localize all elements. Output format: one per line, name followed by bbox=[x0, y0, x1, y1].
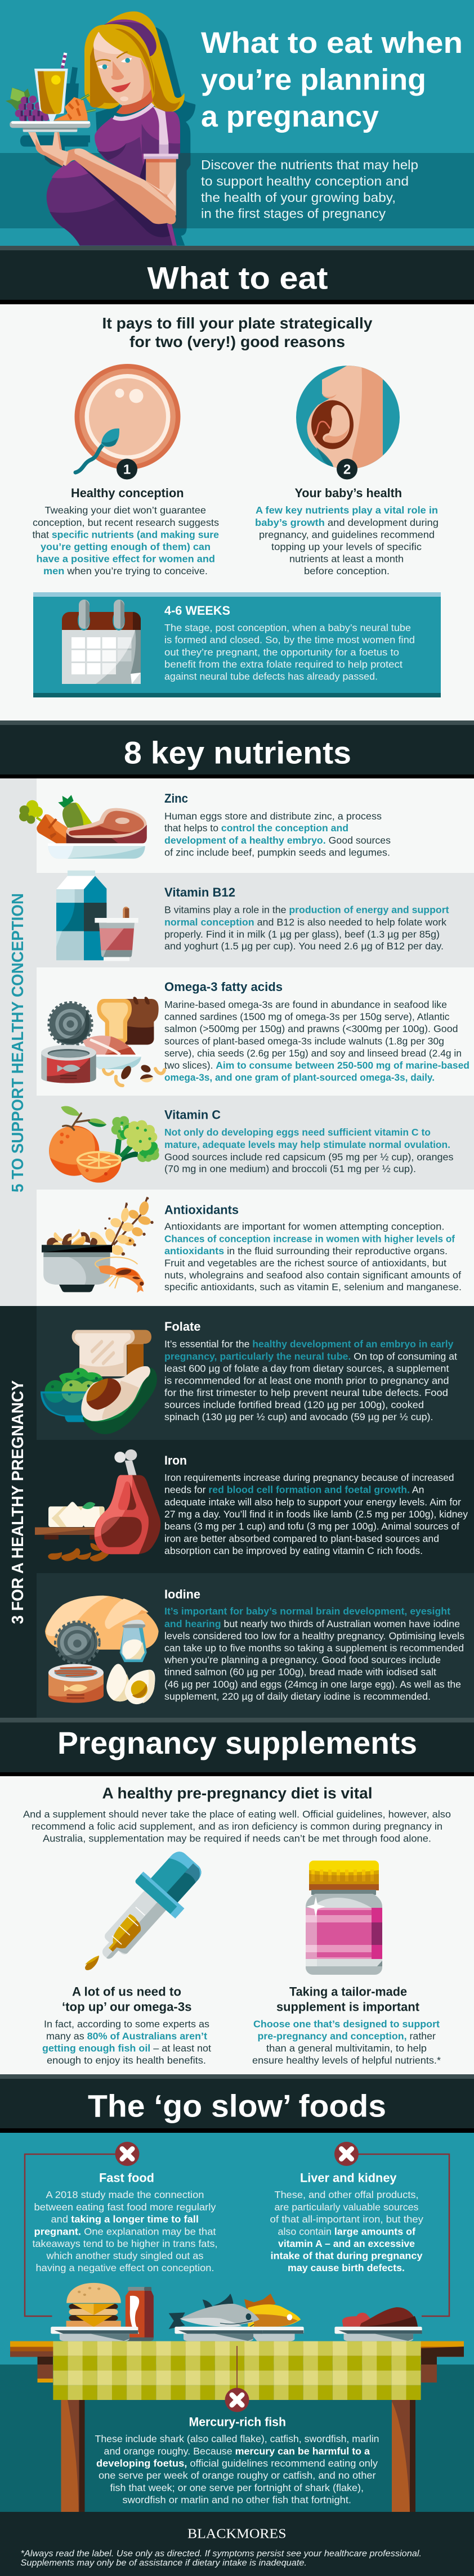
text block: liver and kidney: of that all-important iron, but they bbox=[270, 2214, 423, 2225]
text block: tailor-made supplement: than a general multivitamin, to help bbox=[266, 2043, 427, 2054]
text block: liver and kidney: intake of that during pregnancy bbox=[270, 2250, 423, 2261]
icon: calendar bbox=[62, 600, 141, 684]
food: fish bbox=[169, 2294, 304, 2341]
text: antioxidants: specific antioxidants, such as vitamin E, selenium and manganese. bbox=[164, 1281, 462, 1292]
icon: milk carton and yoghurt bbox=[56, 871, 138, 961]
text block: fast food: pregnant. One explanation may be that bbox=[34, 2226, 216, 2237]
vertical label: 3 for a healthy pregnancy: 3 FOR A HEALTHY PREGNANCY bbox=[9, 1380, 27, 1624]
text: folate: least 600 µg of folate a day from dietary sources, a supplement bbox=[164, 1363, 449, 1374]
subtitle: to support healthy conception and bbox=[201, 174, 409, 188]
text block: tailor-made supplement bbox=[252, 1984, 441, 2066]
text: iodine bbox=[164, 1587, 464, 1702]
text: antioxidants bbox=[164, 1203, 462, 1292]
text block: mercury-rich fish: fish that week; or one serve per fortnight of shark (flake), bbox=[110, 2482, 364, 2493]
pin line and cross badge: mercury bbox=[225, 2346, 249, 2412]
icon: cross badge, fast food bbox=[115, 2142, 140, 2166]
text: zinc: that helps to control the conception and bbox=[164, 822, 348, 834]
text block: your baby's health: before conception. bbox=[304, 565, 390, 577]
text block: healthy pre-pregnancy diet: Australia, supplementation may be required if needs can’t be met through food alone. bbox=[43, 1832, 431, 1844]
text block: healthy conception: you’re getting enough of them) can bbox=[41, 541, 211, 552]
subtitle bbox=[201, 157, 418, 220]
text block: top up omega-3s: enough to enjoy its health benefits. bbox=[47, 2055, 206, 2066]
text: folate bbox=[164, 1319, 457, 1422]
text block: top up omega-3s bbox=[42, 1984, 211, 2066]
text block: your baby's health: A few key nutrients play a vital role in bbox=[256, 505, 438, 516]
panel: footer bbox=[0, 2512, 474, 2576]
icon: egg and sperm bbox=[74, 364, 180, 472]
text block: top up omega-3s: getting enough fish oil – at least not bbox=[42, 2043, 211, 2054]
food: liver bbox=[334, 2307, 422, 2341]
icon: folate foods bbox=[41, 1330, 157, 1434]
text: iodine: Iodine bbox=[164, 1587, 200, 1601]
text block: tailor-made supplement: Choose one that’s designed to support bbox=[253, 2018, 440, 2029]
section header: 8 key nutrients bbox=[0, 720, 474, 778]
text: folate: is recommended for at least one month prior to pregnancy and bbox=[164, 1375, 449, 1386]
text: omega-3: omega-3s, and one gram of plant-sourced omega-3s, daily. bbox=[164, 1072, 435, 1083]
text: omega-3: sources of plant-based omega-3s include walnuts (1.8g per 30g bbox=[164, 1035, 444, 1047]
text: zinc: Human eggs store and distribute zinc, a process bbox=[164, 810, 382, 822]
text block: your baby's health: pregnancy, and guidelines recommend bbox=[259, 529, 435, 540]
vertical label: 5 to support healthy conception: 5 TO SUPPORT HEALTHY CONCEPTION bbox=[9, 893, 27, 1192]
text block: mercury-rich fish: developing foetus, official guidelines recommend eating only bbox=[96, 2458, 378, 2469]
illustration: table with foods bbox=[10, 2283, 464, 2512]
text block: mercury-rich fish: swordfish or marlin and no other fish that fortnight. bbox=[123, 2494, 351, 2505]
text: vitamin C: mature, adequate levels may help stimulate normal ovulation. bbox=[164, 1139, 450, 1150]
text block: mercury-rich fish: one serve per week of orange roughy or catfish, and no other bbox=[99, 2470, 376, 2481]
text block: healthy conception: conception, but recent research suggests bbox=[33, 517, 219, 528]
illustration: pregnant woman with tray of food bbox=[6, 11, 195, 246]
text: iodine: when you’re planning a pregnancy. Good food sources include bbox=[164, 1654, 441, 1665]
title: a pregnancy bbox=[201, 100, 379, 133]
text: iodine: can take up to five months so taking a supplement is recommended bbox=[164, 1642, 464, 1654]
text: vitamin B12: B vitamins play a role in the production of energy and support bbox=[164, 904, 449, 916]
panel: nutrient rows background bbox=[0, 778, 474, 1718]
tablecloth bbox=[53, 2341, 421, 2400]
text: 4-6 weeks: against neural tube defects has already passed. bbox=[164, 670, 378, 682]
text: folate: spinach (130 µg per ½ cup) and avocado (59 µg per ½ cup). bbox=[164, 1411, 433, 1422]
icon: zinc foods bbox=[19, 795, 147, 859]
outline: liver and kidney box bbox=[346, 2154, 449, 2316]
text block: your baby's health: topping up your levels of specific bbox=[271, 541, 422, 552]
text: zinc: development of a healthy embryo. Good sources bbox=[164, 835, 391, 846]
text block: tailor-made supplement: pre-pregnancy and conception, rather bbox=[258, 2030, 436, 2042]
section header: What to eat: What to eat bbox=[147, 260, 328, 296]
text: zinc: of zinc include beef, pumpkin seeds and legumes. bbox=[164, 847, 390, 858]
text block: liver and kidney: are particularly valuable sources bbox=[275, 2201, 419, 2213]
text: omega-3: serve), chia seeds (2.6g per 15g) and soy and linseed bread (2.4g in bbox=[164, 1047, 462, 1059]
text block: your baby's health bbox=[255, 486, 439, 577]
text: iodine: levels considered too low for a healthy pregnancy. Optimising levels bbox=[164, 1630, 464, 1641]
text block: healthy pre-pregnancy diet: recommend a folic acid supplement, and as iron deficiency is common during pregnancy in bbox=[32, 1821, 442, 1832]
text block: healthy pre-pregnancy diet: And a supplement should never take the place of eating well. Official guidelines, however, also bbox=[23, 1809, 451, 1820]
text: vitamin C: (70 mg in one medium) and broccoli (51 mg per ½ cup). bbox=[164, 1163, 416, 1174]
title: you’re planning bbox=[201, 63, 426, 97]
subtitle: Discover the nutrients that may help bbox=[201, 157, 418, 172]
text: omega-3: canned sardines (1500 mg of omega-3s per 150g serve), Atlantic bbox=[164, 1011, 450, 1023]
text: vitamin C: Not only do developing eggs need sufficient vitamin C to bbox=[164, 1127, 431, 1138]
text block: liver and kidney bbox=[270, 2171, 423, 2273]
text: 4-6 weeks bbox=[164, 604, 415, 682]
text: vitamin C: Good sources include red capsicum (95 mg per ½ cup), oranges bbox=[164, 1151, 454, 1163]
section header: go slow foods: The ‘go slow’ foods bbox=[88, 2088, 386, 2124]
text block: liver and kidney: may cause birth defects. bbox=[288, 2262, 405, 2273]
badge: 2: 2 bbox=[343, 462, 351, 477]
subtitle: in the first stages of pregnancy bbox=[201, 206, 386, 220]
text: antioxidants: Antioxidants are important for women attempting conception. bbox=[164, 1221, 445, 1232]
icon: cross badge, liver bbox=[334, 2142, 359, 2166]
text: folate: for the first trimester to help prevent neural tube defects. Food bbox=[164, 1387, 448, 1398]
text block: top up omega-3s: A lot of us need to bbox=[72, 1984, 181, 1999]
text: antioxidants: nuts, wholegrains and seafood also contain significant amounts of bbox=[164, 1269, 461, 1281]
disclaimer bbox=[20, 2549, 422, 2568]
text: 4-6 weeks: 4-6 WEEKS bbox=[164, 604, 230, 618]
heading: two good reasons: for two (very!) good reasons bbox=[129, 333, 345, 350]
panel: 4-6 weeks bbox=[33, 592, 441, 697]
logo text: BLACKMORES bbox=[187, 2527, 286, 2541]
text: omega-3: two slices). Aim to consume between 250-500 mg of marine-based bbox=[164, 1060, 469, 1071]
text block: top up omega-3s: ‘top up’ our omega-3s bbox=[62, 2000, 191, 2014]
text: iron: iron are better absorbed compared to plant-based sources and bbox=[164, 1533, 439, 1544]
text block: mercury-rich fish bbox=[95, 2415, 379, 2505]
badge: 1 bbox=[117, 459, 137, 479]
section header: pregnancy supplements bbox=[0, 1718, 474, 1776]
text: iron: 27 mg a day. You’ll find it in foods like lamb (2.5 mg per 100g), kidney bbox=[164, 1508, 468, 1520]
text block: fast food: between eating fast food more regularly bbox=[34, 2201, 216, 2213]
text block: fast food: A 2018 study made the connection bbox=[46, 2189, 204, 2200]
text block: liver and kidney: also contain large amounts of bbox=[278, 2226, 415, 2237]
text block: healthy conception: Tweaking your diet won’t guarantee bbox=[45, 505, 206, 516]
panel: hero bbox=[0, 0, 474, 246]
panel: go slow background bbox=[0, 2133, 474, 2512]
text: vitamin B12: normal conception and B12 is also needed to help folate work bbox=[164, 917, 446, 928]
text: zinc bbox=[164, 791, 391, 858]
badge: 2 bbox=[337, 459, 357, 479]
text block: top up omega-3s: In fact, according to some experts as bbox=[44, 2018, 209, 2029]
text: vitamin B12: Vitamin B12 bbox=[164, 885, 235, 899]
title: What to eat when bbox=[201, 26, 463, 60]
text: antioxidants: Antioxidants bbox=[164, 1203, 239, 1217]
text: omega-3: Omega-3 fatty acids bbox=[164, 980, 283, 994]
table top bbox=[10, 2341, 464, 2383]
section header: 8 key nutrients: 8 key nutrients bbox=[124, 735, 351, 771]
text: 4-6 weeks: The stage, post conception, when a baby’s neural tube bbox=[164, 622, 411, 633]
subtitle: the health of your growing baby, bbox=[201, 190, 396, 205]
text block: healthy conception: men when you’re trying to conceive. bbox=[43, 565, 208, 577]
section header: What to eat bbox=[0, 246, 474, 304]
text block: your baby's health: Your baby’s health bbox=[295, 486, 402, 500]
text block: healthy conception bbox=[33, 486, 219, 577]
text: iron: adequate intake will also help to support your energy levels. Aim for bbox=[164, 1496, 461, 1507]
food: burger and can bbox=[51, 2283, 154, 2341]
text block: fast food: Fast food bbox=[99, 2171, 154, 2185]
text block: mercury-rich fish: These include shark (also called flake), catfish, swordfish, marlin bbox=[95, 2433, 379, 2444]
text: 4-6 weeks: is formed and closed. So, by the time most women find bbox=[164, 634, 415, 646]
text block: fast food: having a negative effect on conception. bbox=[36, 2262, 214, 2273]
icon: supplement jar bbox=[306, 1861, 382, 1975]
text block: healthy conception: have a positive effect for women and bbox=[36, 553, 215, 565]
icon: orange and broccoli bbox=[49, 1106, 159, 1183]
text: folate: sources include fortified bread (120 µg per 100g), cooked bbox=[164, 1399, 424, 1411]
text block: liver and kidney: vitamin A – and an excessive bbox=[278, 2238, 415, 2249]
text block: healthy pre-pregnancy diet bbox=[23, 1784, 451, 1844]
text: vitamin B12 bbox=[164, 885, 449, 952]
text: iron: beans (3 mg per 1 cup) and tofu (3 mg per 100g). Animal sources of bbox=[164, 1521, 459, 1532]
text: antioxidants: Fruit and vegetables are the richest source of antioxidants, but bbox=[164, 1258, 446, 1269]
text block: mercury-rich fish: Mercury-rich fish bbox=[189, 2415, 286, 2429]
text block: liver and kidney: These, and other offal products, bbox=[275, 2189, 419, 2200]
text block: mercury-rich fish: and orange roughy. Because mercury can be harmful to a bbox=[104, 2446, 370, 2457]
text: folate: It’s essential for the healthy development of an embryo in early bbox=[164, 1339, 454, 1350]
text block: tailor-made supplement: ensure healthy levels of helpful nutrients.* bbox=[252, 2055, 441, 2066]
icon: baby in womb bbox=[296, 366, 400, 479]
text: vitamin B12: and yoghurt (1.5 µg per cup). You need 2.6 µg of B12 per day. bbox=[164, 940, 444, 952]
text: antioxidants: antioxidants in the fluid surrounding their reproductive organs. bbox=[164, 1245, 448, 1257]
icon: omega-3 foods bbox=[41, 997, 164, 1086]
text: folate: pregnancy, particularly the neural tube. On top of consuming at bbox=[164, 1351, 457, 1362]
heading: two good reasons: It pays to fill your plate strategically bbox=[102, 314, 373, 332]
text block: tailor-made supplement: supplement is important bbox=[276, 2000, 420, 2014]
text block: healthy conception: Healthy conception bbox=[71, 486, 184, 500]
text: omega-3: salmon (>500mg per 150g) and prawns (<300mg per 100g). Good bbox=[164, 1023, 458, 1034]
outline: fast food box bbox=[25, 2154, 127, 2316]
section header: go slow foods bbox=[0, 2074, 474, 2133]
text: iodine: and hearing but nearly two thirds of Australian women have iodine bbox=[164, 1618, 460, 1629]
icon: iron foods bbox=[35, 1449, 160, 1561]
icon: dropper bbox=[84, 1841, 212, 1975]
text: zinc: Zinc bbox=[164, 791, 188, 805]
text block: tailor-made supplement: Taking a tailor-made bbox=[289, 1984, 407, 1999]
text: vitamin C: Vitamin C bbox=[164, 1108, 221, 1122]
text: antioxidants: Chances of conception increase in women with higher levels of bbox=[164, 1233, 455, 1244]
text: iron: Iron bbox=[164, 1453, 187, 1467]
text: iodine: (46 µg per 100g) and eggs (24mcg in one large egg). As well as the bbox=[164, 1678, 461, 1690]
text: iron: absorption can be improved by eating vitamin C rich foods. bbox=[164, 1545, 423, 1556]
text block: healthy conception: that specific nutrients (and making sure bbox=[33, 529, 219, 540]
disclaimer: *Always read the label. Use only as directed. If symptoms persist see your healthcare professional. bbox=[20, 2549, 422, 2559]
section header: pregnancy supplements: Pregnancy supplements bbox=[57, 1725, 417, 1760]
text block: liver and kidney: Liver and kidney bbox=[300, 2171, 397, 2185]
text: omega-3: Marine-based omega-3s are found in abundance in seafood like bbox=[164, 999, 447, 1010]
text: iodine: It’s important for baby’s normal brain development, eyesight bbox=[164, 1605, 450, 1616]
text block: fast food: takeaways tend to be higher in trans fats, bbox=[33, 2238, 217, 2249]
text: 4-6 weeks: benefit from the extra folate required to help protect bbox=[164, 659, 403, 670]
text: iodine: tinned salmon (60 µg per 100g), bread made with iodised salt bbox=[164, 1666, 436, 1677]
text block: top up omega-3s: many as 80% of Australians aren’t bbox=[46, 2030, 207, 2042]
text block: your baby's health: nutrients at least a month bbox=[289, 553, 404, 565]
text: iron bbox=[164, 1453, 468, 1556]
disclaimer: Supplements may only be of assistance if dietary intake is inadequate. bbox=[20, 2558, 307, 2568]
text block: fast food bbox=[33, 2171, 217, 2273]
text block: your baby's health: baby’s growth and development during bbox=[255, 517, 439, 528]
text: iron: Iron requirements increase during pregnancy because of increased bbox=[164, 1472, 454, 1483]
table legs bbox=[61, 2400, 415, 2512]
text: vitamin B12: properly. Find it in milk (1 µg per glass), beef (1.3 µg per 85g) bbox=[164, 929, 440, 940]
heading: two good reasons bbox=[102, 314, 373, 350]
text: omega-3 bbox=[164, 980, 469, 1083]
badge: 1: 1 bbox=[123, 462, 131, 477]
text: 4-6 weeks: out they’re pregnant, the opportunity for a foetus to bbox=[164, 647, 399, 658]
text: iodine: supplement, 220 µg of daily dietary iodine is recommended. bbox=[164, 1691, 431, 1702]
text: vitamin C bbox=[164, 1108, 454, 1174]
text: folate: Folate bbox=[164, 1319, 200, 1334]
text block: healthy pre-pregnancy diet: A healthy pre-pregnancy diet is vital bbox=[102, 1784, 373, 1802]
icon: iodine foods bbox=[45, 1596, 159, 1704]
icon: antioxidant bowl with nuts and prawn bbox=[42, 1197, 154, 1292]
text: iron: needs for red blood cell formation and foetal growth. An bbox=[164, 1484, 424, 1495]
text block: fast food: which another study singled out as bbox=[46, 2250, 204, 2261]
title bbox=[201, 26, 463, 133]
text block: fast food: and taking a longer time to fall bbox=[51, 2214, 199, 2225]
